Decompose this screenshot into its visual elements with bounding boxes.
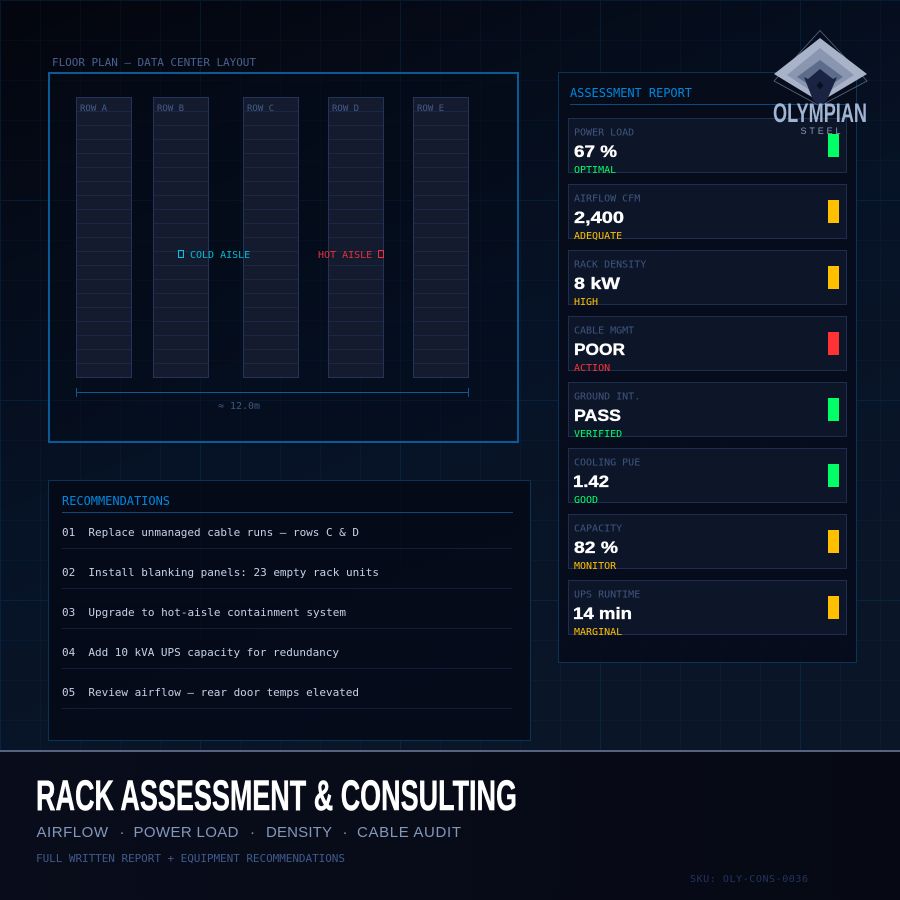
metric: capacity: CAPACITY	[574, 524, 622, 534]
metric: ground integrity: GROUND INT.	[574, 392, 640, 402]
sku: SKU: OLY-CONS-0036	[690, 874, 808, 885]
rack row E: ROW E	[417, 104, 444, 114]
metric: airflow: AIRFLOW CFM	[574, 194, 640, 204]
metric: cooling pue: COOLING PUE	[574, 458, 640, 468]
rack row E	[414, 98, 468, 378]
title: RACK ASSESSMENT & CONSULTING	[36, 772, 517, 820]
icon: layered diamond mark	[774, 30, 867, 106]
subtitle	[36, 824, 461, 841]
subtitle: AIRFLOW	[36, 824, 109, 841]
metric: capacity: 82 %	[574, 538, 618, 557]
dimension line: ≈ 12.0m	[218, 401, 260, 412]
rack row B: ROW B	[157, 104, 184, 114]
metric: ground integrity: PASS	[574, 406, 621, 425]
panel: assessment report	[558, 72, 856, 662]
metric: power load: 67 %	[574, 142, 617, 161]
logo subtitle: STEEL	[800, 126, 840, 136]
metric: rack density: HIGH	[574, 297, 598, 308]
metric: ups runtime	[568, 580, 846, 638]
recommendation 03: 03 Upgrade to hot-aisle containment system	[62, 606, 346, 619]
rack row C: ROW C	[247, 104, 274, 114]
metric: cable management: CABLE MGMT	[574, 326, 634, 336]
recommendations heading: RECOMMENDATIONS	[62, 494, 170, 508]
metric: capacity: MONITOR	[574, 561, 617, 572]
subtitle: ·	[250, 824, 255, 841]
subtitle: ·	[342, 824, 348, 841]
rack row D: ROW D	[332, 104, 359, 114]
metric: ups runtime: 14 min	[573, 604, 632, 623]
assessment report heading: ASSESSMENT REPORT	[570, 86, 692, 100]
metric: cable management: ACTION	[574, 363, 610, 374]
metric: ups runtime: UPS RUNTIME	[574, 590, 640, 600]
rack row D	[328, 98, 384, 378]
recommendation 04: 04 Add 10 kVA UPS capacity for redundancy	[62, 646, 339, 659]
metric: airflow	[568, 184, 846, 242]
recommendation 02: 02 Install blanking panels: 23 empty rack units	[62, 566, 379, 579]
logo: Olympian Steel	[773, 30, 867, 136]
metric: rack density: RACK DENSITY	[574, 260, 646, 270]
metric: ground integrity: VERIFIED	[574, 429, 622, 440]
rack row A	[76, 98, 132, 378]
metric: cooling pue	[568, 448, 846, 506]
metric: cable management: POOR	[574, 340, 625, 359]
recommendation 01: 01 Replace unmanaged cable runs — rows C & D	[62, 526, 359, 539]
subtitle: CABLE AUDIT	[357, 824, 461, 841]
footer band	[0, 750, 900, 900]
recommendation 05: 05 Review airflow — rear door temps elevated	[62, 686, 359, 699]
metric: cooling pue: GOOD	[574, 495, 598, 506]
metric: cooling pue: 1.42	[573, 472, 609, 491]
hot aisle label: HOT AISLE	[318, 250, 372, 261]
floor plan heading: FLOOR PLAN — DATA CENTER LAYOUT	[52, 56, 256, 69]
metric: capacity	[568, 514, 846, 572]
subtitle: ·	[120, 824, 124, 841]
rack row B	[154, 98, 208, 378]
metric: cable management	[568, 316, 846, 374]
metric: rack density	[568, 250, 846, 308]
rack row C	[244, 98, 298, 378]
metric: airflow: 2,400	[574, 208, 624, 227]
floor plan frame	[49, 73, 518, 442]
rack row A: ROW A	[80, 104, 108, 114]
footnote: FULL WRITTEN REPORT + EQUIPMENT RECOMMENDATIONS	[36, 852, 345, 865]
panel: recommendations	[48, 480, 530, 740]
subtitle: POWER LOAD	[134, 824, 239, 841]
metric: power load: OPTIMAL	[574, 165, 616, 176]
subtitle: DENSITY	[266, 824, 332, 841]
metric: airflow: ADEQUATE	[574, 231, 622, 242]
metric: power load	[568, 118, 846, 176]
metric: ground integrity	[568, 382, 846, 440]
metric: rack density: 8 kW	[574, 274, 621, 293]
panel: floor plan	[49, 56, 518, 442]
dimension line	[76, 388, 468, 412]
metric: ups runtime: MARGINAL	[574, 627, 622, 638]
metric: power load: POWER LOAD	[574, 128, 634, 138]
cold aisle label: COLD AISLE	[190, 250, 250, 261]
